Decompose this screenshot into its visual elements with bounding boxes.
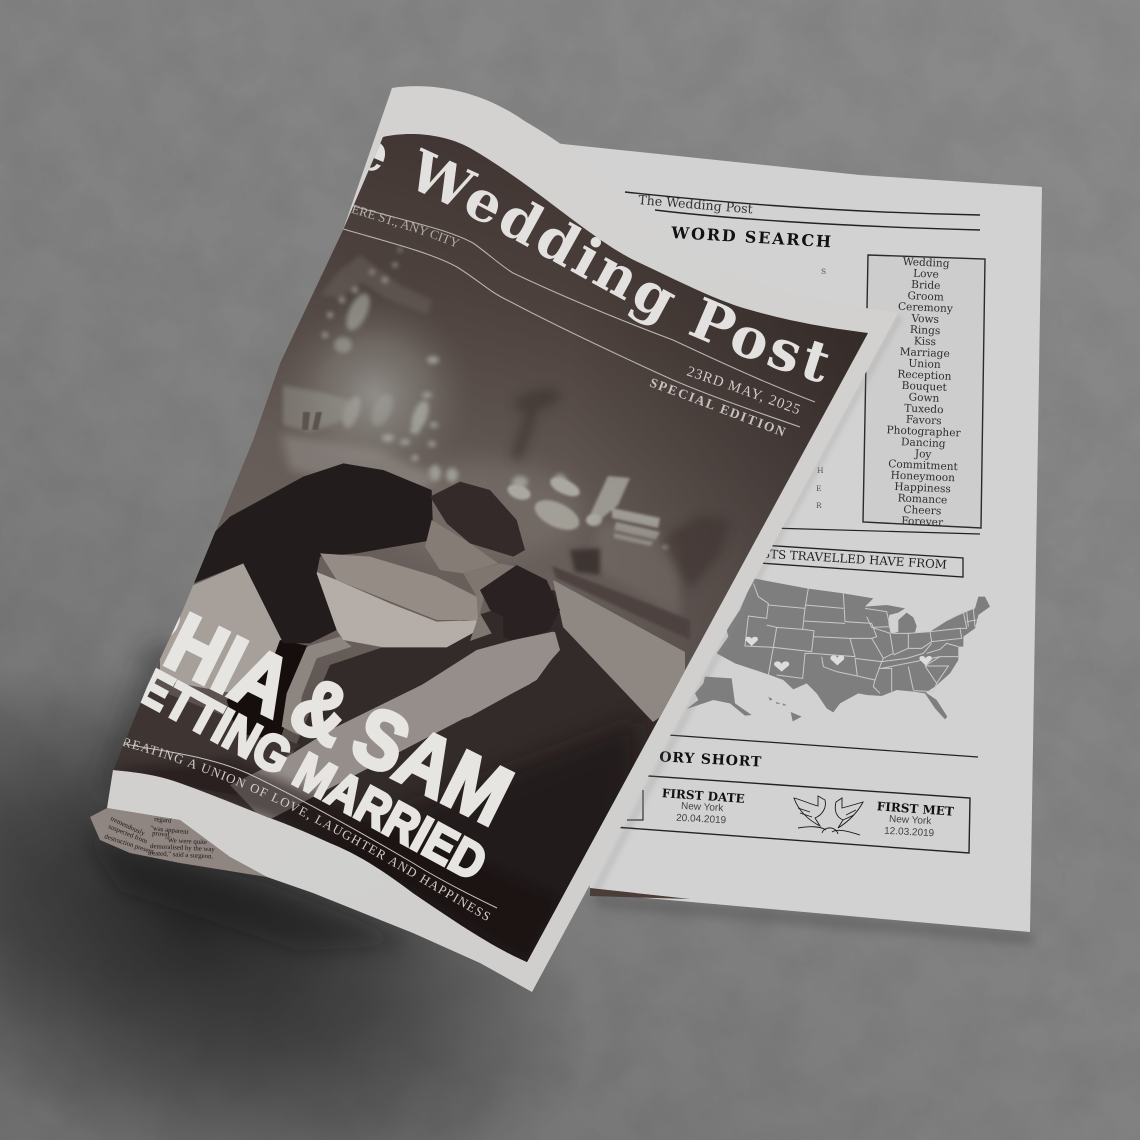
- veil head: [421, 632, 554, 719]
- page header: [625, 192, 980, 230]
- word list box: Bride: [911, 279, 941, 292]
- road asphalt: [260, 590, 680, 980]
- word search grid letters: H: [817, 466, 824, 475]
- icon: two doves: [794, 796, 863, 835]
- street lights to the right: [505, 474, 670, 550]
- word list box: Happiness: [894, 481, 951, 495]
- inner page article text: tremendously: [109, 815, 146, 838]
- Hawaii: [768, 697, 802, 721]
- front page sheet: [107, 86, 898, 992]
- heading: word search: WORD SEARCH: [670, 223, 833, 251]
- heart markers: [745, 637, 932, 672]
- background glow: [300, 316, 452, 459]
- word list box: Bouquet: [901, 380, 948, 394]
- left asphalt band: [100, 685, 300, 795]
- inner page article text: "We were quite: [165, 837, 207, 846]
- word list box: Favors: [906, 414, 942, 427]
- photo base tone: [100, 120, 880, 980]
- Alaska: [687, 677, 752, 716]
- edition: SPECIAL EDITION: [650, 378, 786, 436]
- bridal veil: [230, 632, 560, 822]
- inner page article text: destruction present: [103, 833, 155, 856]
- word list box: Kiss: [914, 335, 936, 348]
- inner page article text: demoralised by the way: [150, 843, 216, 853]
- word list box: Ceremony: [898, 301, 953, 315]
- back page sheet: [553, 143, 1042, 932]
- word list box: Reception: [897, 368, 952, 383]
- word list box: Vows: [910, 313, 939, 326]
- word list box: Joy: [914, 448, 932, 461]
- neon sign lights: [283, 248, 567, 490]
- word list box: Photographer: [886, 424, 962, 440]
- word list box: Wedding: [902, 256, 950, 270]
- man's hair: [430, 482, 525, 557]
- story timeline box: [600, 774, 970, 853]
- map: United States with heart markers: [687, 578, 990, 721]
- word list box: Commitment: [888, 458, 959, 473]
- woman's hair: [480, 565, 560, 644]
- address: WHERE ST., ANY CITY: [351, 204, 460, 247]
- silhouetted pedestrians: [302, 412, 322, 430]
- road side ground: [280, 432, 432, 488]
- couple group: [160, 463, 560, 740]
- map states fill: [717, 578, 990, 719]
- tagline rule: [120, 743, 497, 908]
- shadow of front page onto back page: [590, 313, 903, 895]
- word list box: Rings: [910, 324, 941, 337]
- woman's face: [463, 563, 517, 641]
- word list box: Honeymoon: [890, 470, 955, 484]
- first date: FIRST DATE: [661, 786, 745, 806]
- word search grid letters: [816, 267, 826, 510]
- word list box: Forever: [901, 515, 944, 529]
- man's black jacket: [193, 463, 433, 643]
- word list box: Cheers: [903, 504, 942, 518]
- word list box: Dancing: [901, 436, 946, 450]
- man's leg shadow: [227, 640, 312, 740]
- masthead title: The Wedding Post: [368, 143, 828, 382]
- white dress: [312, 570, 478, 647]
- brown underside sliver: [590, 888, 690, 899]
- first date: New York: [681, 801, 725, 814]
- first met: 12.03.2019: [884, 826, 935, 839]
- word list box: Gown: [908, 391, 940, 405]
- map state lines: [745, 583, 977, 693]
- masthead rule lines: [340, 205, 815, 427]
- heading: our story short: OUR STORY SHORT: [593, 746, 762, 771]
- word list box: Groom: [907, 290, 944, 304]
- palm tree: [510, 388, 558, 461]
- date: 23RD MAY, 2025: [686, 366, 800, 414]
- car lights: [570, 548, 600, 575]
- first met: New York: [889, 814, 933, 827]
- word list box: Tuxedo: [904, 403, 944, 416]
- panel: curled inner page with article text: [90, 808, 267, 877]
- inner page article text: regard: [154, 816, 172, 825]
- inner page article text: suspected from: [107, 823, 149, 846]
- first date: 20.04.2019: [676, 813, 727, 826]
- inner page article text: proval.: [152, 830, 172, 839]
- inner page article text: [103, 815, 216, 860]
- word search grid letters: S: [821, 267, 826, 276]
- tagline: CREATING A UNION OF LOVE, LAUGHTER AND HAPPINESS: [122, 738, 490, 920]
- panel: back newspaper page: [553, 143, 1042, 932]
- panel: front newspaper page: [107, 86, 898, 992]
- word search grid letters: R: [816, 501, 822, 510]
- couple names headline: SOPHIA & SAM: [15, 526, 526, 843]
- man's face: [425, 520, 498, 573]
- word list box: Romance: [897, 492, 948, 507]
- word search grid letters: E: [816, 484, 821, 493]
- first met: FIRST MET: [876, 799, 954, 819]
- guests travelled heading box: GUESTS TRAVELLED HAVE FROM: [734, 545, 947, 572]
- word list box: [863, 255, 985, 529]
- getting married headline: ARE GETTING MARRIED: [4, 591, 495, 892]
- page header: The Wedding Post: [638, 192, 753, 216]
- palm tree right side: [660, 515, 730, 590]
- first met: [876, 799, 954, 839]
- woman's arm: [320, 553, 478, 620]
- first date: [661, 786, 745, 826]
- gown trailing on the left: [160, 563, 283, 693]
- road edge marking: [553, 580, 685, 722]
- word list box: Marriage: [899, 346, 950, 360]
- inner page article text: treated," said a surgeon.: [148, 850, 214, 860]
- woman's leg: [282, 637, 352, 735]
- word list box: Union: [908, 358, 941, 371]
- photo: couple kissing on the road: [113, 134, 868, 962]
- word list box: Love: [913, 268, 939, 281]
- inner page article text: "was apparent: [150, 825, 189, 836]
- bottom vignette: [123, 758, 404, 886]
